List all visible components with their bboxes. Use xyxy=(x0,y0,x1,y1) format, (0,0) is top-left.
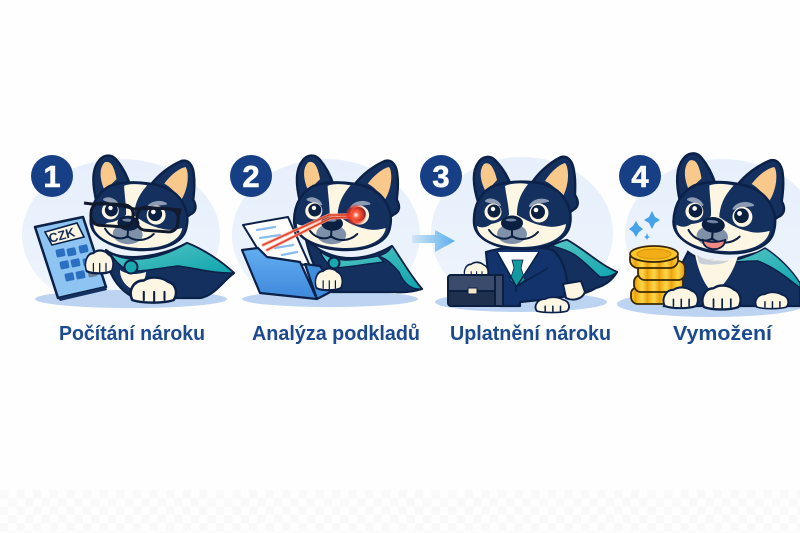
open mouth with tongue xyxy=(703,240,725,249)
number badge 4 xyxy=(619,155,661,197)
ground shadow 1 xyxy=(35,290,227,308)
paws 4 xyxy=(664,285,788,309)
panel: step 4 enforcement xyxy=(617,152,800,345)
coin stack xyxy=(630,246,685,304)
background circle 1 xyxy=(22,159,220,311)
ground shadow 4 xyxy=(617,291,800,317)
number badge 3 xyxy=(420,155,462,197)
ground shadow 2 xyxy=(242,291,418,307)
foot 3 xyxy=(536,297,569,313)
calculator: CZK xyxy=(47,224,77,246)
background circle 4 xyxy=(625,159,800,311)
panel: step 2 analysing documents xyxy=(230,154,422,345)
dog body with cape 2 xyxy=(306,240,422,292)
number badge 4: 4 xyxy=(631,159,649,194)
paw on folder xyxy=(315,268,342,290)
dog head 3 xyxy=(474,157,578,249)
calculator xyxy=(35,217,107,301)
background circle 3 xyxy=(431,157,613,309)
arrow between steps xyxy=(412,230,455,252)
hand on briefcase xyxy=(464,262,488,279)
briefcase xyxy=(448,275,503,306)
laser beams xyxy=(263,215,357,250)
sparkles xyxy=(629,211,660,240)
laser eye glow xyxy=(345,204,367,226)
dog body with cape 1 xyxy=(106,243,234,303)
folder xyxy=(242,248,336,299)
label 2: Analýza podkladů xyxy=(252,323,420,345)
number badge 3: 3 xyxy=(432,159,450,194)
glasses xyxy=(84,203,180,233)
dog head 1 xyxy=(89,154,199,254)
document with lines xyxy=(243,217,310,266)
dog body with cape 4 xyxy=(664,248,800,306)
panel: step 1 counting the claim xyxy=(22,154,234,345)
cape 3 xyxy=(545,240,617,294)
number badge 2 xyxy=(230,155,272,197)
label 1: Počítání nároku xyxy=(59,323,205,345)
label 4: Vymožení xyxy=(673,323,774,345)
dog head 2 xyxy=(292,154,402,254)
number badge 1 xyxy=(31,155,73,197)
teal cape lining xyxy=(552,240,617,277)
cuff and hand xyxy=(563,281,585,300)
number badge 1: 1 xyxy=(43,159,61,194)
suit xyxy=(486,247,568,306)
number badge 2: 2 xyxy=(242,159,260,194)
checker strip at bottom xyxy=(0,490,800,533)
ground shadow 3 xyxy=(435,292,607,312)
background circle 2 xyxy=(232,159,420,311)
dog head 4 xyxy=(671,152,788,258)
label 3: Uplatnění nároku xyxy=(450,323,611,345)
panel: step 3 asserting the claim xyxy=(420,155,617,345)
paw on calculator xyxy=(85,250,113,273)
